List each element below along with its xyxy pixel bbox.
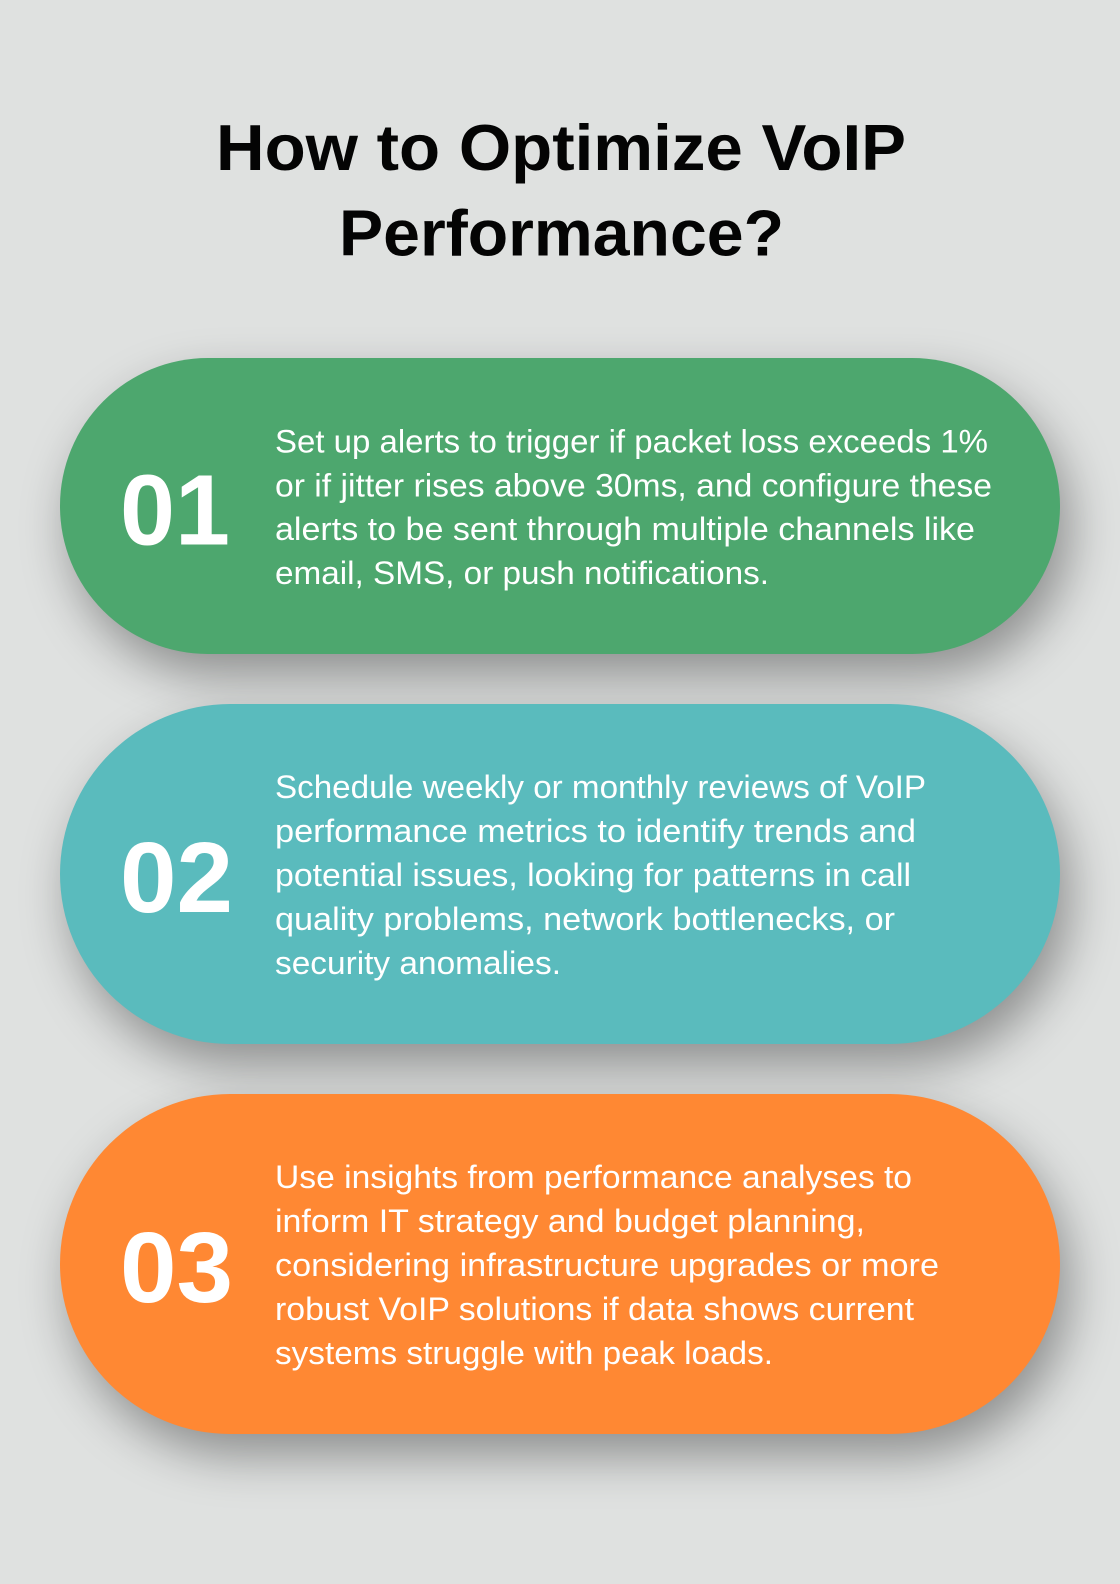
number 02: 02 <box>120 822 233 934</box>
title: How to Optimize VoIP <box>216 111 906 184</box>
text: step 03 description: Use insights from performance analyses to <box>275 1159 912 1195</box>
title: Performance? <box>339 197 784 270</box>
text: step 01 description: alerts to be sent through multiple channels like <box>275 511 975 547</box>
text: step 02 description: potential issues, looking for patterns in call <box>275 857 911 893</box>
text: step 03 description: considering infrastructure upgrades or more <box>275 1247 939 1283</box>
text: step 01 description <box>275 424 992 591</box>
panel: step 01 <box>60 358 1060 654</box>
text: step 03 description: inform IT strategy and budget planning, <box>275 1203 865 1239</box>
panel: step 03 <box>60 1094 1060 1434</box>
text: step 03 description <box>275 1159 939 1371</box>
text: step 02 description: quality problems, network bottlenecks, or <box>275 901 895 937</box>
title <box>216 111 906 270</box>
text: step 01 description: Set up alerts to trigger if packet loss exceeds 1% <box>275 424 988 460</box>
panel: step 02 <box>60 704 1060 1044</box>
number 01: 01 <box>120 454 230 566</box>
text: step 02 description <box>275 769 926 981</box>
text: step 01 description: email, SMS, or push notifications. <box>275 555 769 591</box>
text: step 02 description: security anomalies. <box>275 945 561 981</box>
text: step 03 description: robust VoIP solutions if data shows current <box>275 1291 914 1327</box>
text: step 02 description: Schedule weekly or monthly reviews of VoIP <box>275 769 926 805</box>
number 03: 03 <box>120 1212 233 1324</box>
text: step 02 description: performance metrics to identify trends and <box>275 813 916 849</box>
text: step 03 description: systems struggle with peak loads. <box>275 1335 773 1371</box>
text: step 01 description: or if jitter rises above 30ms, and configure these <box>275 468 992 504</box>
